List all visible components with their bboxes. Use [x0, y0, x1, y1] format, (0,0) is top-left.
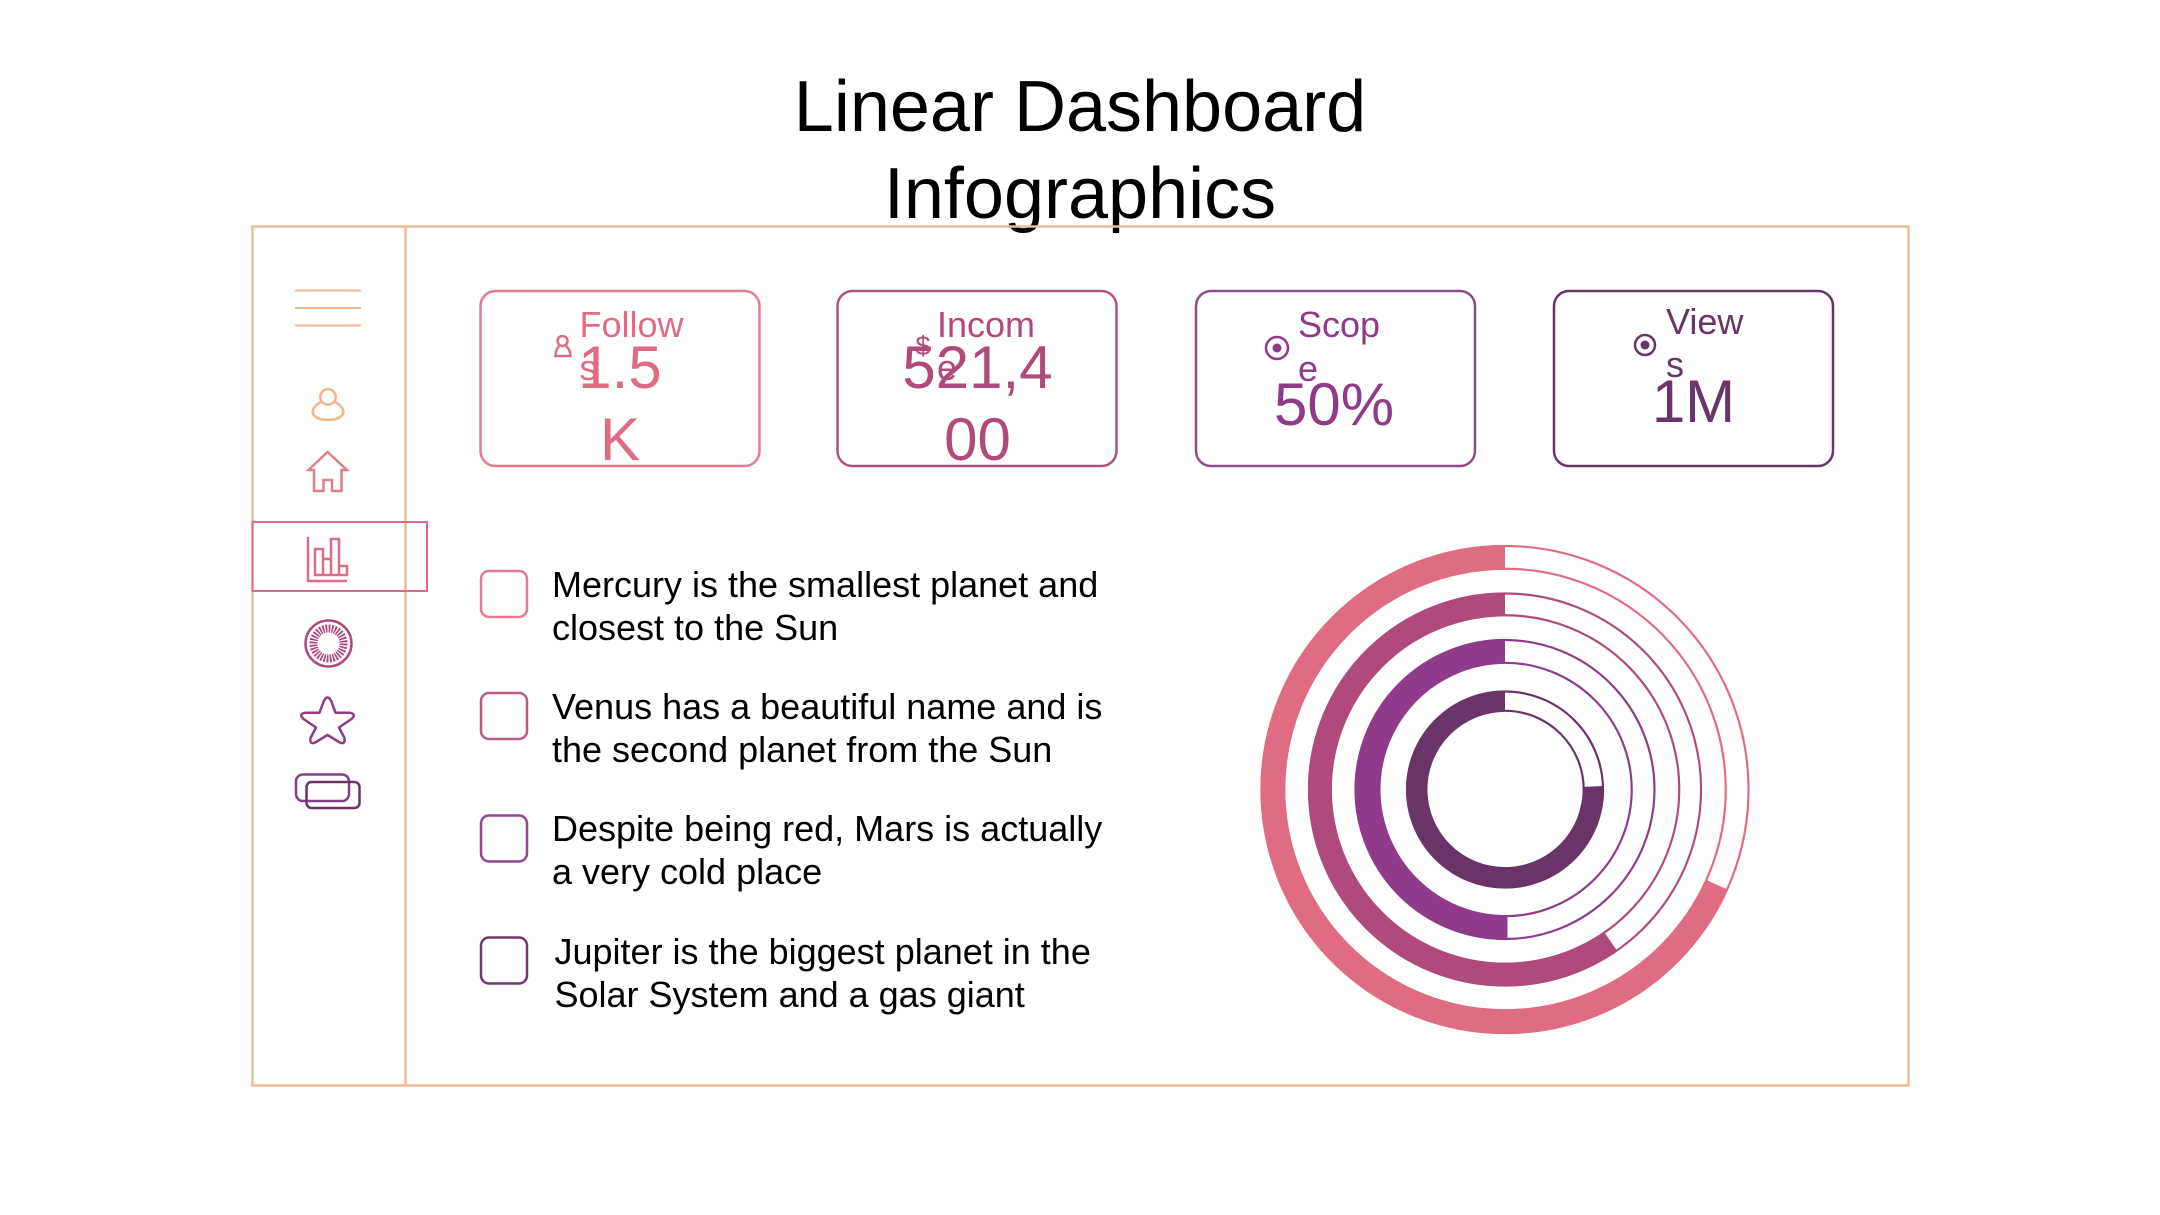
list item: Jupiter	[481, 931, 1091, 1015]
icon: bar chart	[308, 537, 347, 581]
panel: dashboard frame	[252, 226, 1908, 1086]
icon: radial dial	[306, 620, 352, 666]
followers value: K	[600, 406, 640, 473]
list item: Venus	[481, 686, 1102, 770]
panel: income card	[838, 291, 1116, 473]
panel: followers card	[480, 291, 760, 473]
income value: 00	[944, 406, 1011, 473]
list item: Venus: Venus has a beautiful name and is	[552, 686, 1102, 727]
icon: dollar: $	[916, 331, 931, 361]
icon: eye	[1635, 335, 1655, 355]
icon: stacked cards	[296, 774, 360, 808]
title	[794, 67, 1366, 234]
title: Infographics	[884, 154, 1276, 234]
ring 4	[1406, 690, 1604, 888]
followers label: s	[580, 347, 598, 388]
icon: home	[308, 452, 347, 491]
panel: views card	[1554, 291, 1833, 466]
scope label: e	[1298, 348, 1318, 389]
views label: s	[1666, 344, 1684, 385]
icon: small user	[556, 336, 570, 356]
list item: Mercury: Mercury is the smallest planet and	[552, 564, 1098, 605]
list item: Mars	[481, 808, 1102, 892]
income label: e	[937, 347, 957, 388]
income label: Incom	[937, 304, 1035, 345]
title: Linear Dashboard	[794, 67, 1366, 147]
list item: Venus: the second planet from the Sun	[552, 729, 1052, 770]
scope value: 50%	[1274, 371, 1394, 438]
icon: hamburger menu	[295, 290, 361, 326]
income value: 521,4	[902, 334, 1053, 401]
panel: scope card	[1196, 291, 1475, 466]
followers value: 1.5	[578, 334, 662, 401]
ring 3	[1356, 639, 1654, 940]
scope label: Scop	[1298, 304, 1380, 345]
list item: Jupiter: Jupiter is the biggest planet in the	[554, 931, 1091, 972]
list item: Mercury	[481, 564, 1098, 648]
list item: Mercury: closest to the Sun	[552, 607, 838, 648]
list item: Mars: a very cold place	[552, 851, 822, 892]
views value: 1M	[1652, 368, 1735, 435]
list item: Mars: Despite being red, Mars is actually	[552, 808, 1102, 849]
chart: concentric radial progress rings	[1260, 545, 1749, 1034]
ring 1	[1260, 545, 1749, 1034]
selected menu highlight	[252, 522, 427, 591]
list item: Jupiter: Solar System and a gas giant	[554, 974, 1025, 1015]
ring 2	[1308, 592, 1701, 987]
followers label: Follow	[580, 304, 684, 345]
icon: target	[1266, 337, 1288, 359]
views label: View	[1666, 301, 1743, 342]
icon: star	[301, 698, 354, 743]
icon: user	[313, 389, 343, 420]
